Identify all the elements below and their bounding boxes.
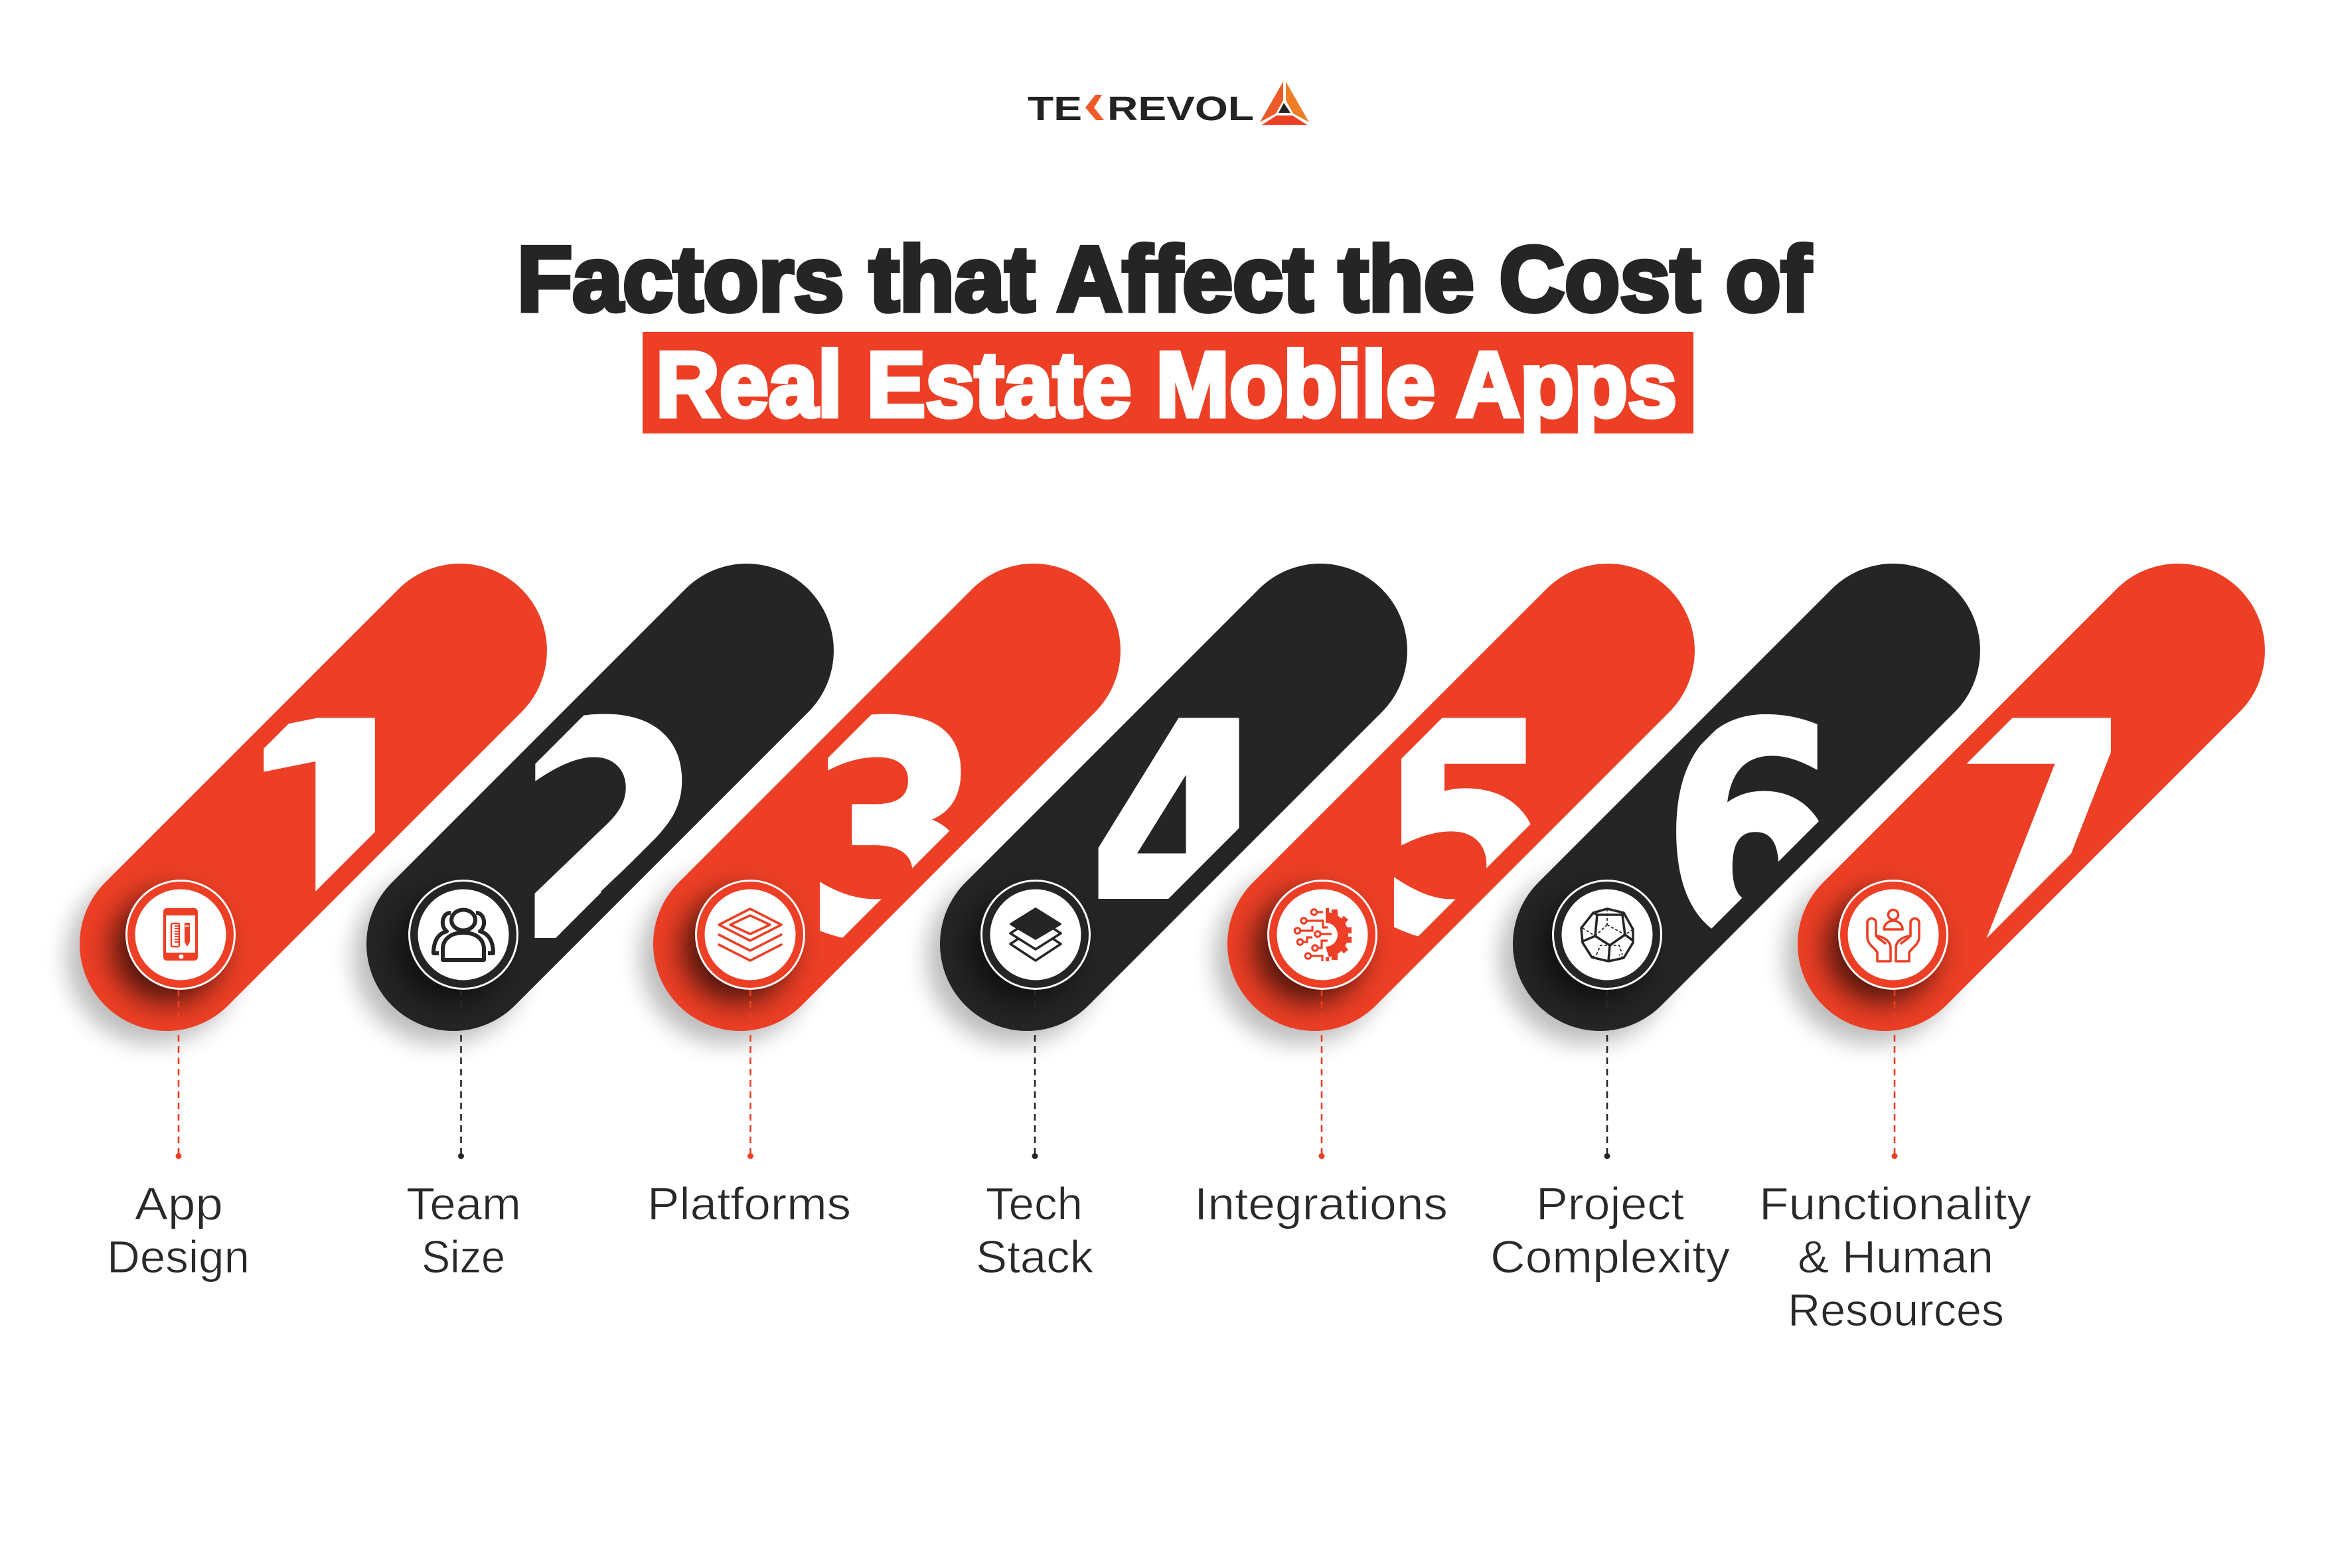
label: App Design: App [135, 1178, 223, 1229]
label: Project Complexity: Complexity [1490, 1231, 1731, 1283]
logo: Tekrevol [1028, 82, 1309, 127]
factor 2: capsule: 2 [516, 662, 704, 1005]
factor 2: capsule [341, 564, 834, 1159]
icon: hands holding person [1867, 909, 1919, 961]
label: Project Complexity [1490, 1178, 1731, 1283]
label: Tech Stack: Tech [986, 1178, 1083, 1229]
label: Platforms: Platforms [647, 1178, 851, 1229]
logo: Tekrevol: REVOL [1107, 90, 1254, 127]
label: Tech Stack: Stack [976, 1231, 1094, 1283]
icon: gear with circuit [1294, 908, 1352, 961]
factor 6: capsule: 6 [1663, 663, 1841, 1006]
label: Functionality & Human Resources [1759, 1178, 2032, 1336]
label: Team Size: Team [406, 1178, 521, 1229]
title line 2 banner: Real Estate Mobile Apps [656, 333, 1677, 436]
label: Functionality & Human Resources: Resources [1788, 1285, 2004, 1336]
icon: dodecahedron [1581, 909, 1633, 961]
logo: Tekrevol: TE [1028, 90, 1082, 127]
factor 7: capsule [1772, 564, 2265, 1159]
factor 4: capsule: 4 [1089, 662, 1277, 1005]
label: Team Size [406, 1178, 521, 1283]
label: App Design: Design [107, 1231, 250, 1283]
factor 1: capsule [54, 564, 547, 1159]
icon: solid stacked layers [1010, 909, 1061, 961]
factor 5: capsule: 5 [1377, 663, 1555, 1006]
label: Integrations: Integrations [1194, 1178, 1448, 1229]
factor 3: capsule: 3 [805, 663, 983, 1006]
factor 4: capsule [915, 564, 1407, 1159]
label: App Design [107, 1178, 250, 1283]
factor 7: capsule: 7 [1952, 662, 2129, 1005]
factor 5: capsule [1203, 564, 1695, 1159]
icon: outlined layers [719, 909, 781, 961]
label: Team Size: Size [422, 1231, 505, 1283]
title line 1: Factors that Affect the Cost of [517, 228, 1812, 331]
factor 6: capsule [1488, 564, 1980, 1159]
icon: team of people [433, 909, 493, 960]
factor 3: capsule [628, 564, 1121, 1159]
icon: tablet with ruler and pencil [163, 908, 198, 961]
label: Functionality & Human Resources: & Human [1798, 1231, 1993, 1283]
label: Tech Stack [976, 1178, 1094, 1283]
label: Functionality & Human Resources: Functionality [1759, 1178, 2032, 1229]
label: Project Complexity: Project [1536, 1178, 1684, 1229]
factor 1: capsule: 1 [232, 663, 443, 1005]
